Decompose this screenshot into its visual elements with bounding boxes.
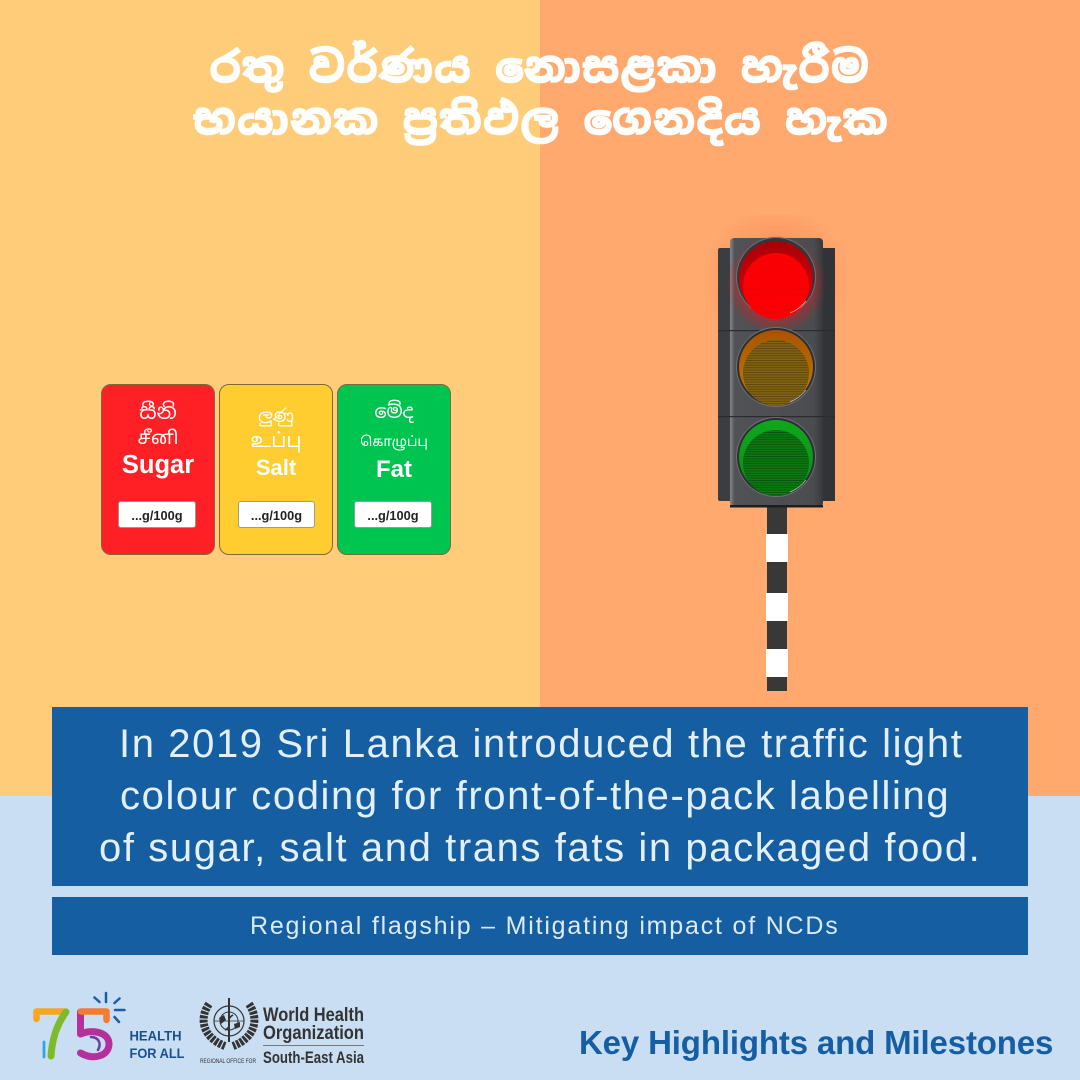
- logo: 75 health for all: [33, 992, 185, 1061]
- logo: world health organization: [200, 998, 364, 1066]
- statement text: In 2019 Sri Lanka introduced the traffic light: [119, 722, 963, 766]
- title: [193, 40, 889, 147]
- lamp: red: [736, 238, 816, 319]
- who emblem: [204, 998, 254, 1046]
- panel: main statement: [52, 707, 1028, 886]
- numeral 5: [80, 1012, 109, 1057]
- who name: REGIONAL OFFICE FOR: [200, 1059, 257, 1065]
- card: sugar: Sugar: [122, 451, 194, 479]
- background: left yellow panel: [0, 0, 540, 796]
- red glow: [701, 205, 851, 355]
- card: salt: [219, 384, 333, 555]
- card: sugar: සීනි: [139, 399, 177, 426]
- statement text: [99, 722, 981, 870]
- background: right orange panel: [540, 0, 1080, 796]
- title: රතු වර්ණය නොසළකා හැරීම: [210, 40, 870, 95]
- logo: 75 health for all: FOR ALL: [130, 1045, 185, 1061]
- card: sugar: ...g/100g: [131, 508, 183, 523]
- sun rays: [94, 993, 124, 1022]
- card: fat: [337, 384, 451, 555]
- flagship text: Regional flagship – Mitigating impact of NCDs: [250, 912, 840, 940]
- statement text: of sugar, salt and trans fats in packaged food.: [99, 826, 981, 870]
- card: salt: Salt: [256, 455, 296, 480]
- traffic light: [718, 222, 835, 691]
- statement text: colour coding for front-of-the-pack labelling: [120, 774, 950, 818]
- signal housing: [718, 234, 835, 508]
- title: භයානක ප්‍රතිඵල ගෙනදිය හැක: [193, 92, 889, 147]
- who name: [200, 1005, 364, 1067]
- lamp: green: [736, 418, 816, 496]
- card: fat: ...g/100g: [367, 508, 419, 523]
- panel: flagship strip: [52, 897, 1028, 955]
- lamp: amber: [736, 328, 816, 406]
- card: fat: Fat: [376, 456, 412, 483]
- card: sugar: [101, 384, 215, 555]
- card: fat: கொழுப்பு: [360, 434, 428, 451]
- numeral 7: [36, 1012, 66, 1057]
- signal pole: [766, 505, 788, 691]
- health for all text: HEALTH: [130, 1028, 182, 1044]
- footer heading: Key Highlights and Milestones: [579, 1024, 1053, 1061]
- card: salt: ලුණු: [258, 405, 294, 428]
- card: fat: මේද: [374, 399, 413, 424]
- card: salt: உப்பு: [250, 431, 302, 455]
- card: salt: ...g/100g: [251, 508, 302, 523]
- card: sugar: சீனி: [137, 428, 179, 451]
- panel: front-of-pack label cards: [101, 384, 451, 555]
